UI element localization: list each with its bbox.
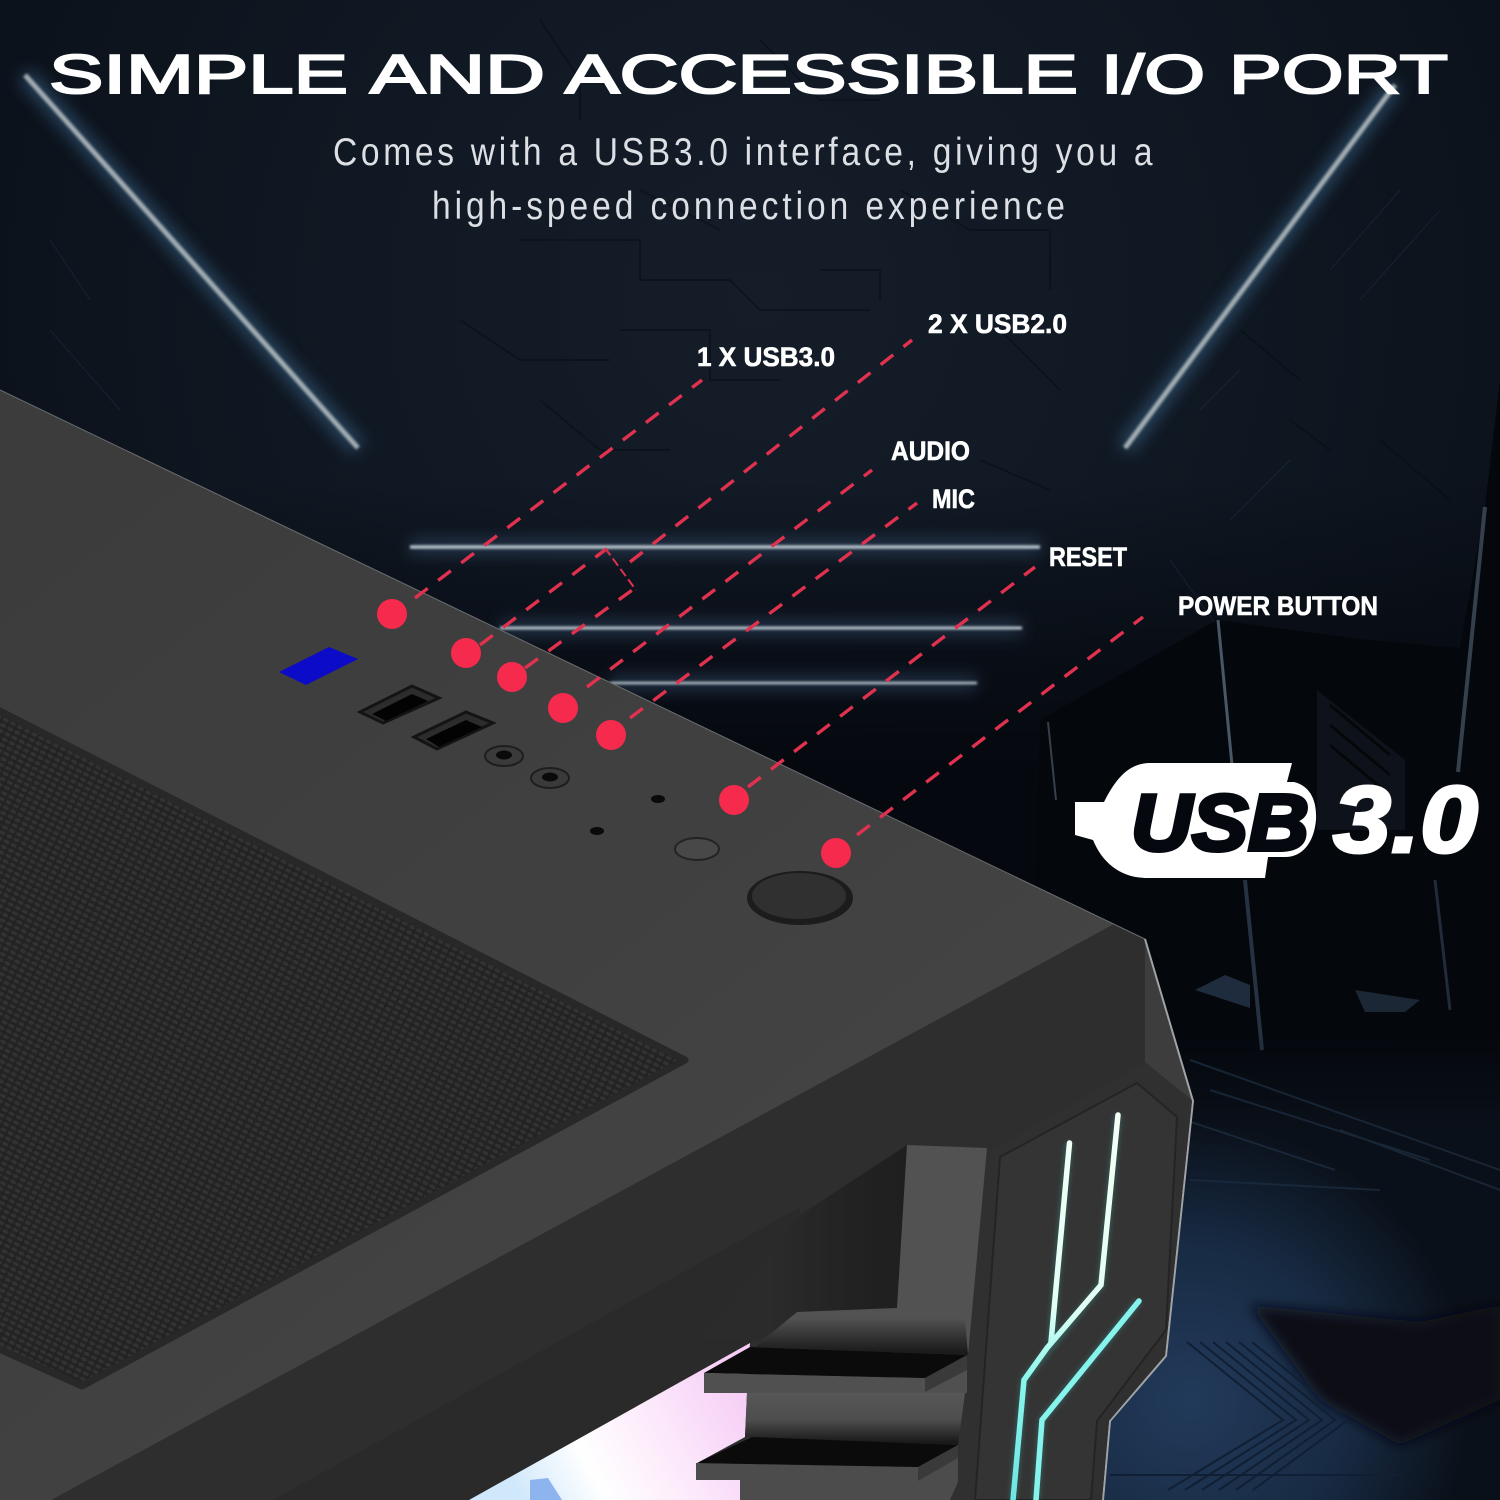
callout labels: MIC	[932, 484, 975, 514]
audio jack	[485, 746, 523, 766]
title: I/O	[1101, 43, 1205, 105]
power button	[747, 871, 853, 925]
mesh dust filter panel	[0, 706, 685, 1386]
glowing diagonal and horizontal light bars	[25, 75, 1395, 683]
callout labels: 2 X USB2.0	[928, 309, 1067, 339]
USB 3.0 logo: USB	[1131, 778, 1309, 867]
mic jack	[531, 768, 569, 788]
USB 3.0 logo	[1075, 763, 1478, 878]
callout labels: POWER BUTTON	[1178, 591, 1378, 621]
USB 3.0 logo: 3.0	[1333, 767, 1478, 873]
reset button	[675, 838, 719, 860]
title: AND	[370, 43, 545, 105]
callout labels: 1 X USB3.0	[697, 342, 835, 372]
light strip right	[1036, 1301, 1139, 1500]
title: ACCESSIBLE	[565, 43, 1078, 105]
callout markers	[377, 599, 851, 868]
subtitle: high-speed connection experience	[432, 184, 1065, 228]
indicator hole	[651, 795, 665, 803]
vent fin lower	[697, 1437, 958, 1467]
fan glow	[469, 1343, 750, 1500]
I/O port controls	[279, 647, 853, 925]
dashed callout leader lines	[415, 340, 1143, 835]
USB2.0 port two	[414, 712, 493, 749]
subtitle: Comes with a USB3.0 interface, giving you a	[333, 130, 1153, 174]
front vent notch	[696, 1145, 987, 1500]
USB2.0 port one	[360, 686, 439, 723]
indicator hole	[590, 827, 604, 835]
dark hallway wall with pillars	[1030, 380, 1500, 1100]
light strip main	[1013, 1115, 1118, 1500]
callout labels	[697, 309, 1378, 621]
vent fin upper	[704, 1347, 967, 1378]
light strip left	[1051, 1143, 1070, 1342]
hallway floor	[1100, 1030, 1500, 1500]
PC case body	[0, 390, 1193, 1500]
title: SIMPLE	[49, 43, 348, 105]
subtitle	[333, 130, 1153, 228]
title: PORT	[1229, 43, 1448, 105]
callout labels: RESET	[1049, 542, 1127, 572]
title	[49, 43, 1448, 105]
blue USB3.0 port	[279, 647, 358, 685]
callout labels: AUDIO	[891, 436, 970, 466]
side front panel with RGB light strips	[950, 1062, 1192, 1500]
